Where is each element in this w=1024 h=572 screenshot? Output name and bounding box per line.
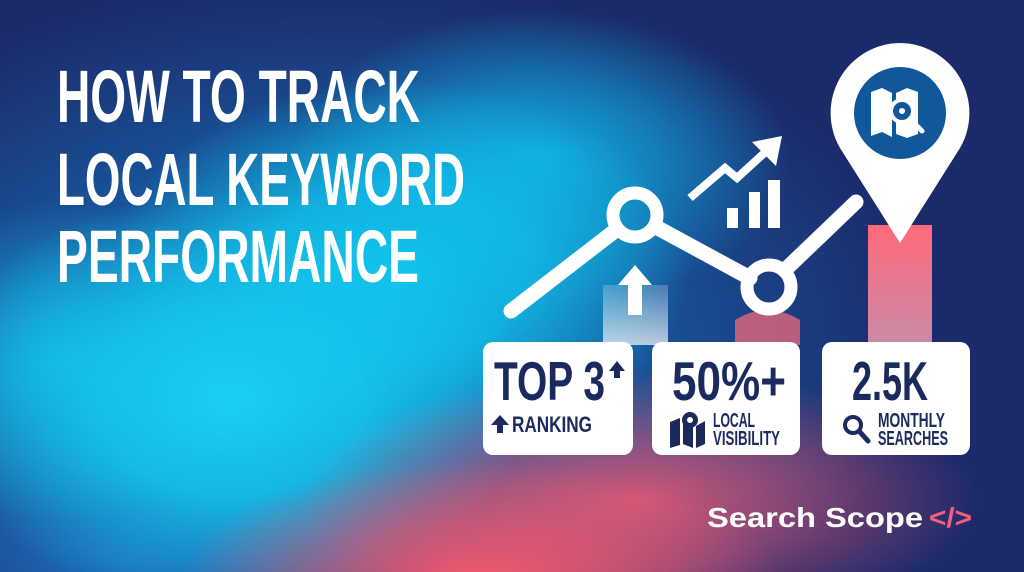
icon: up arrow on bar <box>618 265 652 315</box>
line chart <box>511 193 856 311</box>
card: top 3 ranking: RANKING <box>512 412 592 437</box>
card: local visibility <box>652 342 800 455</box>
card: local visibility: LOCAL <box>713 410 755 432</box>
card: monthly searches: SEARCHES <box>878 428 948 450</box>
card: monthly searches: 2.5K <box>852 350 928 412</box>
card: local visibility: VISIBILITY <box>713 428 780 450</box>
brand logo: Search Scope <box>707 502 923 533</box>
icon: location pin with map search <box>831 43 969 243</box>
background bars <box>603 225 932 345</box>
title <box>57 55 465 298</box>
card: top 3 ranking <box>483 342 633 455</box>
title: LOCAL KEYWORD <box>57 138 465 221</box>
card: monthly searches: MONTHLY <box>878 410 945 432</box>
card: monthly searches <box>822 342 970 455</box>
card: top 3 ranking: TOP 3 <box>494 350 605 412</box>
brand logo: </> <box>929 502 972 533</box>
brand logo <box>707 502 972 533</box>
icon: trend arrow and bars <box>690 136 782 228</box>
card: local visibility: 50%+ <box>672 350 786 412</box>
title: PERFORMANCE <box>57 215 419 298</box>
title: HOW TO TRACK <box>57 55 420 138</box>
